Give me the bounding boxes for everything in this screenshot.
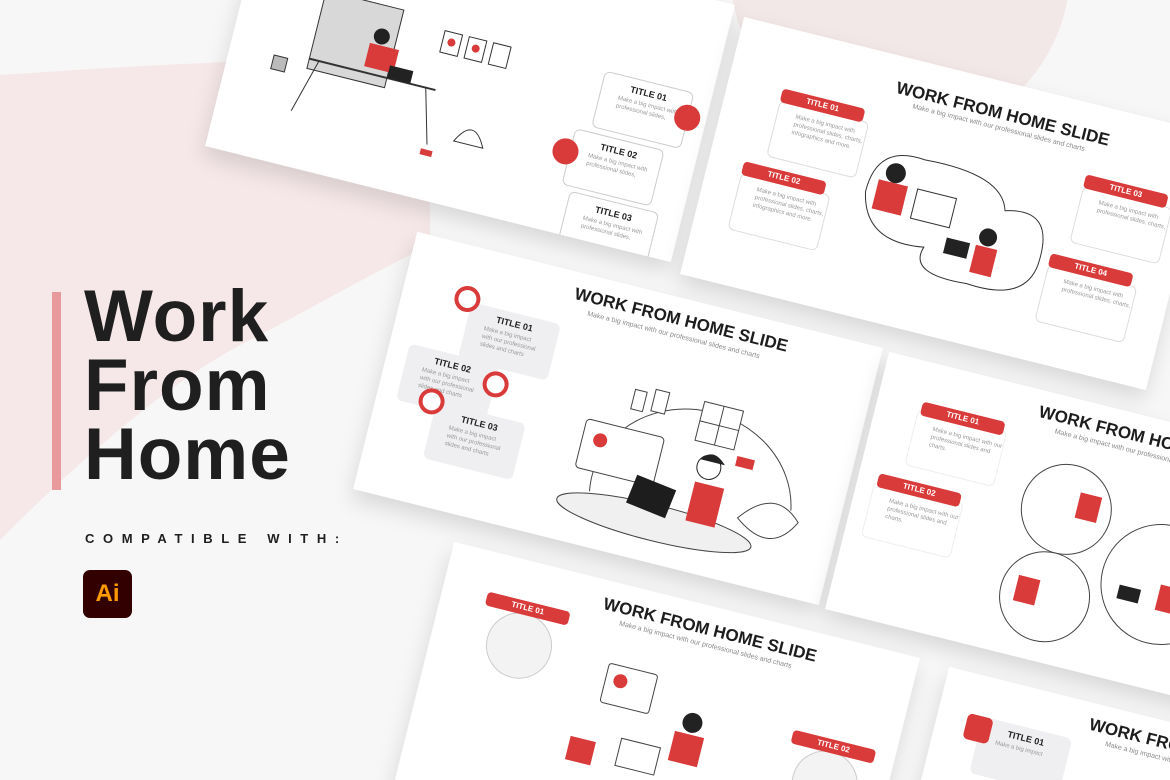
- illustration: [999, 464, 1170, 645]
- slide 3 middle: TITLE 02: [433, 356, 472, 375]
- slide 6 bottom right: [885, 667, 1170, 780]
- slide 2 top-right: TITLE 03: [1109, 182, 1143, 199]
- slide 5 bottom middle: Make a big impact with our professional slides and charts: [618, 620, 792, 670]
- illustration: [565, 663, 704, 776]
- slide 3 middle: with our professional: [419, 375, 474, 394]
- cards: TITLE 01: [495, 315, 534, 334]
- title: WORK FROM HOME SLIDE: [894, 78, 1112, 150]
- card: [969, 717, 1072, 780]
- cards: [458, 302, 561, 381]
- cards: [591, 71, 694, 149]
- main title: From: [84, 345, 270, 426]
- slide 3 middle: Make a big impact: [448, 425, 497, 443]
- slide 3 middle: TITLE 03: [460, 414, 499, 433]
- slide 1 top-left: Make a big impact with professional slides,: [585, 153, 648, 179]
- slide 2 top-right: [680, 17, 1170, 390]
- illustration: desk by window: [270, 0, 512, 157]
- illustration: man at laptop: [556, 388, 799, 554]
- slide 3 middle: slides and charts: [444, 441, 489, 458]
- slide 3 middle: Make a big impact: [421, 367, 470, 385]
- compatible with label: COMPATIBLE WITH:: [85, 531, 348, 546]
- slide 2 top-right: Make a big impact with professional slides, charts,: [1061, 279, 1131, 310]
- slide 4 right middle: Make a big impact with our professional slides and charts.: [928, 427, 1003, 455]
- main title: Home: [84, 414, 291, 495]
- cards: with our professional: [481, 334, 536, 353]
- slide 5 bottom middle: TITLE 02: [816, 738, 851, 755]
- cards: TITLE 01: [946, 410, 980, 427]
- slide 2 top-right: Make a big impact with our professional slides and charts: [912, 103, 1085, 153]
- cards: TITLE 01: [805, 97, 840, 113]
- icon: Adobe Illustrator: [83, 570, 132, 618]
- slide 2 top-right: Make a big impact with professional slides, charts,: [1096, 200, 1166, 231]
- slide 2 top-right: Make a big impact with professional slides, charts, infographics and more.: [791, 114, 863, 150]
- icon: Adobe Illustrator: Ai: [96, 580, 120, 607]
- card: TITLE 01: [1006, 729, 1045, 748]
- slide 3 middle: [353, 232, 883, 605]
- cards: [780, 88, 866, 123]
- slide 2 top-right: TITLE 02: [767, 169, 801, 186]
- slide 1 top-left: Make a big impact with professional slides,: [580, 216, 643, 242]
- cards: TITLE 01: [511, 600, 545, 617]
- slide 3 middle: with our professional: [446, 433, 501, 452]
- title: WORK FROM HOME SLIDE: [573, 284, 790, 356]
- slide 3 middle: slides and charts: [417, 383, 462, 399]
- slide 1 top-left: [205, 0, 735, 262]
- cards: [485, 592, 571, 626]
- slide 1 top-left: TITLE 02: [599, 142, 638, 161]
- slide 4 right middle: [825, 352, 1170, 725]
- illustration: [864, 155, 1044, 291]
- title: WORK FROM HOME SLIDE: [601, 594, 819, 666]
- slide 2 top-right: Make a big impact with professional slides, charts, infographics and more.: [752, 187, 824, 223]
- accent bar: [52, 292, 61, 490]
- slide 3 middle: Make a big impact with our professional slides and charts: [587, 311, 760, 360]
- main title: [84, 276, 291, 495]
- cards: slides and charts: [479, 341, 524, 358]
- slide 4 right middle: Make a big impact with our professional slides and charts.: [884, 498, 959, 527]
- slide 1 top-left: TITLE 03: [594, 204, 633, 223]
- cards: [920, 402, 1006, 436]
- slide 5 bottom middle: [390, 542, 920, 780]
- card: Make a big impact: [994, 740, 1043, 758]
- cards: Make a big impact with professional slides,: [615, 96, 678, 121]
- main title: Work: [84, 276, 269, 357]
- slide 4 right middle: TITLE 02: [902, 481, 936, 498]
- cards: Make a big impact: [483, 326, 532, 344]
- cards: TITLE 01: [629, 84, 668, 103]
- slide 2 top-right: TITLE 04: [1074, 261, 1108, 278]
